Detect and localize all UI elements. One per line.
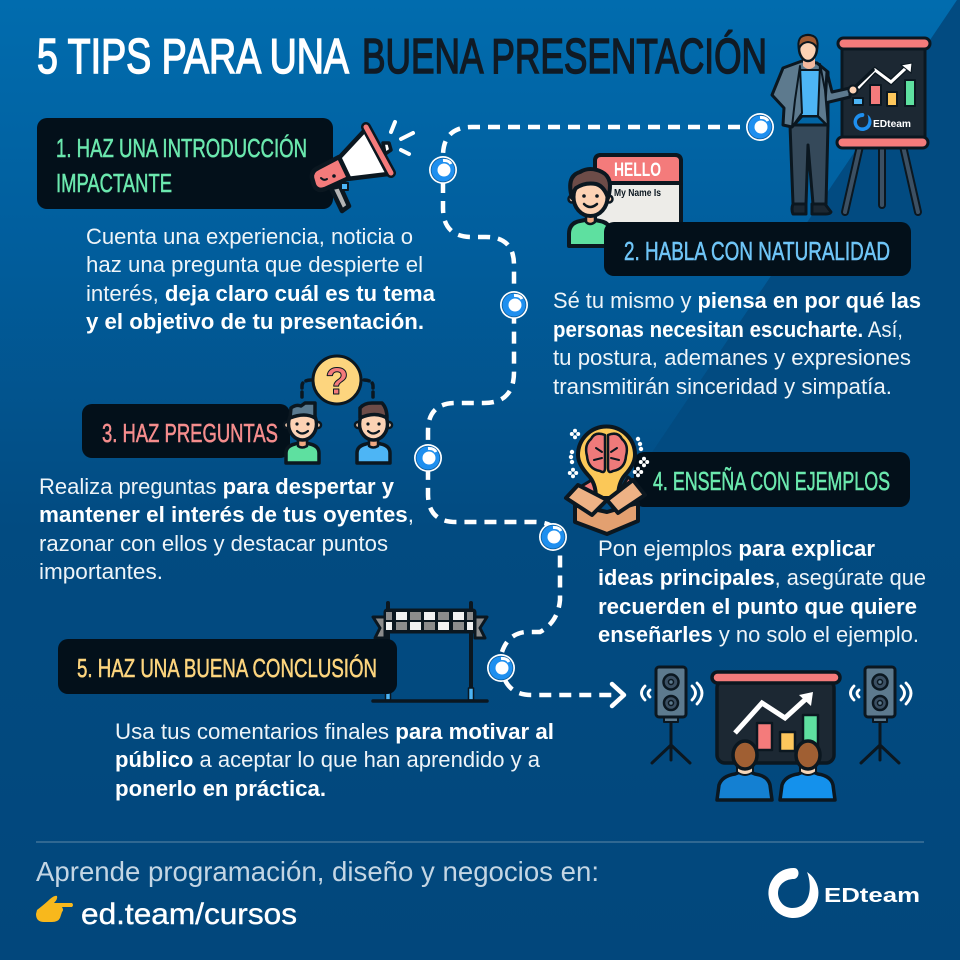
easel logo: EDteam: [873, 118, 911, 130]
text: tip 1 body: y el objetivo de tu presentación.: [86, 309, 424, 334]
text: tip 3 body: importantes.: [39, 559, 163, 584]
easel logo: [854, 113, 911, 131]
text: tip 2 body: transmitirán sinceridad y simpatía.: [553, 374, 892, 399]
icon: pointing hand: [36, 896, 73, 922]
icon: two people with question: [284, 356, 392, 463]
easel: [837, 38, 930, 212]
text: tip 4 body: Pon ejemplos para explicar: [598, 536, 875, 561]
dashed route: [428, 127, 760, 695]
panel: tip 3 heading: 3. HAZ PREGUNTAS: [102, 418, 278, 448]
footer text: ed.team/cursos: [81, 898, 297, 931]
footer text: Aprende programación, diseño y negocios en:: [36, 856, 599, 887]
icon: finish line gate: [373, 603, 487, 701]
sparkles: [568, 429, 649, 478]
EDteam logo: EDteam: [824, 884, 920, 907]
text: tip 5 body: ponerlo en práctica.: [115, 776, 326, 801]
title: 5 TIPS PARA UNA: [37, 29, 349, 84]
text: tip 5 body: [115, 719, 554, 801]
text: tip 5 body: Usa tus comentarios finales para motivar al: [115, 719, 554, 744]
icon: hello name tag: My Name Is: [614, 188, 661, 199]
text: tip 3 body: razonar con ellos y destacar puntos: [39, 531, 388, 556]
icon: hello name tag: HELLO: [614, 160, 661, 181]
footer divider: [36, 841, 924, 843]
icon: audience and screen: [642, 667, 911, 800]
footer text: [36, 856, 599, 931]
title: [37, 29, 767, 84]
text: tip 2 body: personas necesitan escucharte. Así,: [553, 317, 903, 342]
person on tag: [568, 169, 612, 246]
person left: [284, 403, 321, 463]
icon: hello name tag: [568, 155, 681, 246]
text: tip 3 body: [39, 474, 414, 584]
text: tip 1 body: haz una pregunta que despierte el: [86, 252, 423, 277]
icon: two people with question: ?: [325, 361, 349, 403]
text: tip 4 body: ideas principales, asegúrate que: [598, 565, 926, 590]
screen: [712, 672, 840, 763]
text: tip 1 body: [86, 224, 436, 334]
arrowhead of route: [612, 684, 624, 706]
text: tip 2 body: tu postura, ademanes y expresiones: [553, 345, 911, 370]
text: tip 1 body: interés, deja claro cuál es tu tema: [86, 281, 436, 306]
icon: megaphone: [312, 122, 413, 211]
text: tip 5 body: público a aceptar lo que han aprendido y a: [115, 747, 541, 772]
text: tip 3 body: Realiza preguntas para despertar y: [39, 474, 395, 499]
panel: tip 4 heading: [634, 452, 910, 507]
panel: tip 5 heading: [58, 639, 397, 694]
text: tip 3 body: mantener el interés de tus oyentes ,: [39, 502, 414, 527]
icon: presenter with easel: [772, 35, 930, 214]
text: tip 2 body: [553, 288, 921, 399]
speaker right: [850, 667, 911, 763]
panel: tip 1 heading: [37, 118, 333, 209]
panel: tip 5 heading: 5. HAZ UNA BUENA CONCLUSIÓN: [77, 653, 377, 683]
panel: tip 1 heading: IMPACTANTE: [56, 168, 172, 198]
text: tip 1 body: Cuenta una experiencia, noticia o: [86, 224, 413, 249]
route nodes: [414, 113, 774, 682]
panel: tip 2 heading: [604, 222, 911, 276]
EDteam logo: [768, 868, 920, 918]
icon: idea box: [566, 426, 649, 534]
speaker left: [642, 667, 702, 763]
text: tip 2 body: Sé tu mismo y piensa en por qué las: [553, 288, 921, 313]
text: tip 4 body: recuerden el punto que quiere: [598, 594, 917, 619]
presenter figure: [772, 35, 873, 214]
text: tip 4 body: enseñarles y no solo el ejemplo.: [598, 622, 919, 647]
brain: [586, 434, 627, 472]
person right: [355, 403, 392, 463]
text: tip 4 body: [598, 536, 926, 647]
panel: tip 3 heading: [82, 404, 290, 458]
title: BUENA PRESENTACIÓN: [362, 29, 767, 84]
audience member right: [780, 741, 835, 800]
panel: tip 1 heading: 1. HAZ UNA INTRODUCCIÓN: [56, 133, 307, 163]
audience member left: [717, 741, 772, 800]
